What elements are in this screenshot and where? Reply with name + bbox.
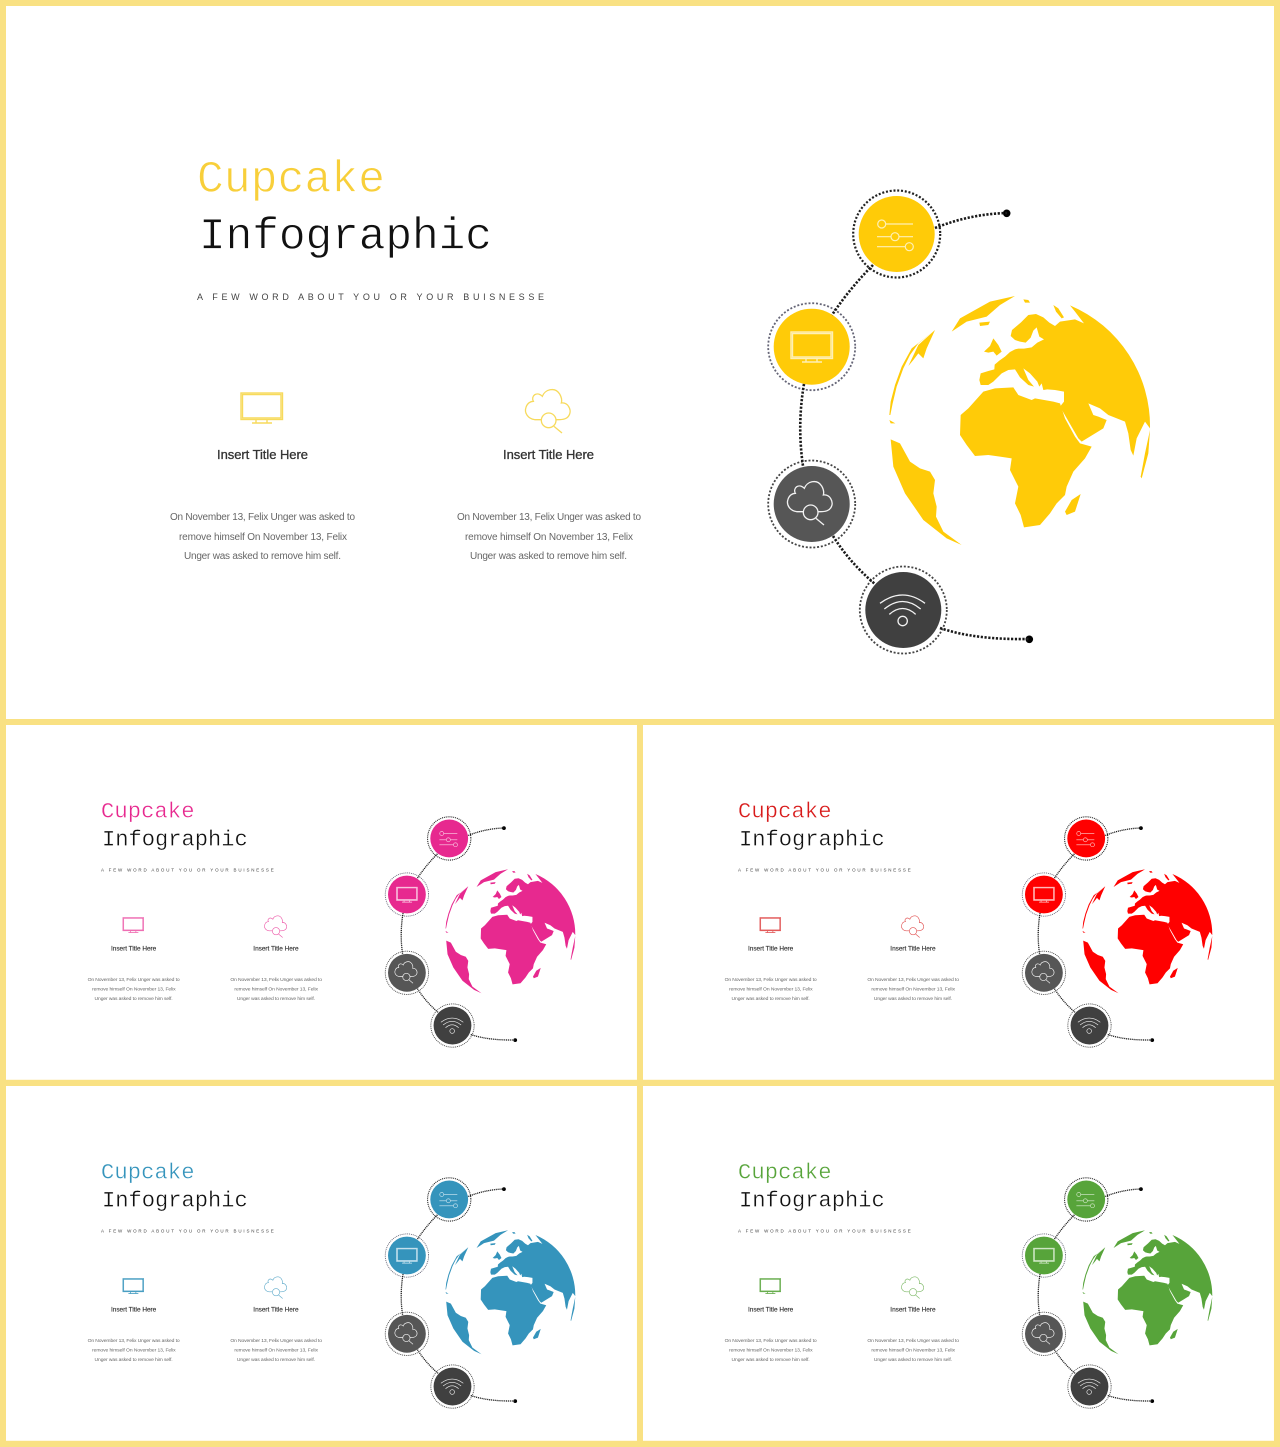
text block: right column: [867, 945, 959, 1002]
title: [101, 799, 248, 853]
dotted connectors: [1038, 828, 1152, 1040]
text block: right column: Unger was asked to remove him self.: [874, 996, 952, 1002]
node: monitor: [768, 303, 855, 390]
subtitle: A FEW WORD ABOUT YOU OR YOUR BUISNESSE: [101, 1228, 274, 1233]
node: wifi: [431, 1004, 474, 1047]
title: Infographic: [102, 1189, 248, 1214]
node: wifi: [1068, 1004, 1111, 1047]
icon: monitor: [123, 1279, 144, 1293]
panel: blue slide: [6, 1086, 637, 1441]
title: Infographic: [199, 212, 492, 262]
end dot top: [1139, 1187, 1143, 1191]
text block: left column: Insert Title Here: [748, 945, 794, 952]
text block: left column: On November 13, Felix Unger was asked to: [725, 977, 817, 983]
panel: green slide: [643, 1086, 1274, 1441]
title: [738, 799, 885, 853]
subtitle: A FEW WORD ABOUT YOU OR YOUR BUISNESSE: [197, 292, 544, 302]
subtitle: A FEW WORD ABOUT YOU OR YOUR BUISNESSE: [101, 867, 274, 872]
title: [197, 156, 492, 262]
text block: left column: On November 13, Felix Unger was asked to: [170, 512, 355, 523]
text block: left column: Insert Title Here: [111, 945, 157, 952]
text block: left column: remove himself On November 13, Felix: [729, 1348, 813, 1354]
icon: cloud search: [264, 916, 287, 937]
text block: right column: [230, 1306, 322, 1363]
end dot bottom: [513, 1038, 517, 1042]
node: sliders: [853, 190, 940, 278]
node: wifi: [1068, 1365, 1111, 1408]
text block: left column: Insert Title Here: [748, 1306, 794, 1313]
text block: left column: [170, 447, 355, 562]
text block: right column: Unger was asked to remove him self.: [874, 1357, 952, 1363]
text block: right column: Insert Title Here: [890, 945, 936, 952]
node: cloud search: [768, 460, 855, 548]
globe: [1083, 869, 1212, 993]
node: cloud search: [385, 1312, 429, 1355]
icon: cloud search: [264, 1277, 287, 1298]
text block: right column: On November 13, Felix Unger was asked to: [867, 977, 959, 983]
text block: left column: Unger was asked to remove him self.: [732, 1357, 810, 1363]
node: sliders: [428, 817, 471, 860]
globe: [446, 1230, 575, 1354]
text block: left column: Unger was asked to remove him self.: [95, 1357, 173, 1363]
globe: [889, 296, 1150, 545]
globe: [1083, 1230, 1212, 1354]
title: Cupcake: [101, 799, 195, 824]
text block: left column: Insert Title Here: [217, 447, 308, 462]
text block: left column: On November 13, Felix Unger was asked to: [725, 1338, 817, 1344]
text block: right column: On November 13, Felix Unger was asked to: [230, 977, 322, 983]
node: monitor: [385, 1234, 429, 1277]
icon: cloud search: [525, 390, 570, 433]
icon: monitor: [760, 918, 781, 932]
text block: left column: Unger was asked to remove him self.: [95, 996, 173, 1002]
text block: right column: remove himself On November 13, Felix: [234, 1348, 319, 1354]
panel: red slide: [643, 725, 1274, 1080]
node: sliders: [428, 1178, 471, 1221]
slide background: [643, 1086, 1274, 1441]
text block: right column: On November 13, Felix Unger was asked to: [457, 512, 641, 523]
node: sliders: [1065, 817, 1108, 860]
node: monitor: [1022, 1234, 1066, 1277]
end dot bottom: [513, 1399, 517, 1403]
node: cloud search: [1022, 1312, 1066, 1355]
text block: right column: Insert Title Here: [503, 447, 594, 462]
end dot top: [502, 826, 506, 830]
node: cloud search: [385, 951, 429, 994]
icon: monitor: [241, 393, 282, 423]
title: Cupcake: [101, 1160, 195, 1185]
text block: right column: On November 13, Felix Unger was asked to: [867, 1338, 959, 1344]
text block: right column: [457, 447, 641, 562]
end dot top: [1139, 826, 1143, 830]
text block: left column: [725, 1306, 817, 1363]
subtitle: A FEW WORD ABOUT YOU OR YOUR BUISNESSE: [738, 867, 911, 872]
dotted connectors: [401, 1189, 515, 1401]
node: sliders: [1065, 1178, 1108, 1221]
title: Cupcake: [197, 156, 385, 206]
text block: left column: On November 13, Felix Unger was asked to: [88, 1338, 180, 1344]
dotted connectors: [401, 828, 515, 1040]
slide background: [6, 1086, 637, 1441]
icon: cloud search: [901, 1277, 924, 1298]
end dot top: [502, 1187, 506, 1191]
text block: right column: Insert Title Here: [253, 945, 299, 952]
node: cloud search: [1022, 951, 1066, 994]
node: wifi: [860, 566, 947, 654]
subtitle: A FEW WORD ABOUT YOU OR YOUR BUISNESSE: [738, 1228, 911, 1233]
title: Infographic: [739, 828, 885, 853]
text block: right column: Insert Title Here: [253, 1306, 299, 1313]
text block: left column: Insert Title Here: [111, 1306, 157, 1313]
text block: right column: On November 13, Felix Unger was asked to: [230, 1338, 322, 1344]
title: [738, 1160, 885, 1214]
text block: right column: Unger was asked to remove him self.: [237, 1357, 315, 1363]
globe: [446, 869, 575, 993]
text block: left column: On November 13, Felix Unger was asked to: [88, 977, 180, 983]
icon: monitor: [760, 1279, 781, 1293]
text block: right column: remove himself On November 13, Felix: [871, 987, 956, 993]
title: [101, 1160, 248, 1214]
panel: large yellow slide: [6, 6, 1274, 719]
title: Cupcake: [738, 799, 832, 824]
title: Infographic: [102, 828, 248, 853]
icon: cloud search: [901, 916, 924, 937]
slide background: [6, 6, 1274, 719]
text block: left column: [725, 945, 817, 1002]
slide background: [6, 725, 637, 1080]
end dot top: [1003, 210, 1010, 217]
text block: right column: remove himself On November 13, Felix: [234, 987, 319, 993]
icon: monitor: [123, 918, 144, 932]
title: Infographic: [739, 1189, 885, 1214]
title: Cupcake: [738, 1160, 832, 1185]
end dot bottom: [1026, 636, 1033, 643]
text block: left column: remove himself On November 13, Felix: [92, 1348, 176, 1354]
dotted connectors: [800, 213, 1029, 639]
node: monitor: [1022, 873, 1066, 916]
text block: right column: remove himself On November 13, Felix: [465, 532, 633, 543]
dotted connectors: [1038, 1189, 1152, 1401]
text block: left column: Unger was asked to remove him self.: [732, 996, 810, 1002]
text block: right column: Insert Title Here: [890, 1306, 936, 1313]
text block: left column: remove himself On November 13, Felix: [179, 532, 347, 543]
text block: left column: [88, 945, 180, 1002]
text block: right column: [867, 1306, 959, 1363]
text block: left column: [88, 1306, 180, 1363]
node: wifi: [431, 1365, 474, 1408]
panel: pink slide: [6, 725, 637, 1080]
text block: right column: Unger was asked to remove him self.: [237, 996, 315, 1002]
text block: right column: remove himself On November 13, Felix: [871, 1348, 956, 1354]
end dot bottom: [1150, 1038, 1154, 1042]
text block: right column: [230, 945, 322, 1002]
node: monitor: [385, 873, 429, 916]
text block: left column: remove himself On November 13, Felix: [729, 987, 813, 993]
text block: left column: remove himself On November 13, Felix: [92, 987, 176, 993]
text block: left column: Unger was asked to remove him self.: [184, 551, 341, 562]
slide background: [643, 725, 1274, 1080]
end dot bottom: [1150, 1399, 1154, 1403]
text block: right column: Unger was asked to remove him self.: [470, 551, 627, 562]
